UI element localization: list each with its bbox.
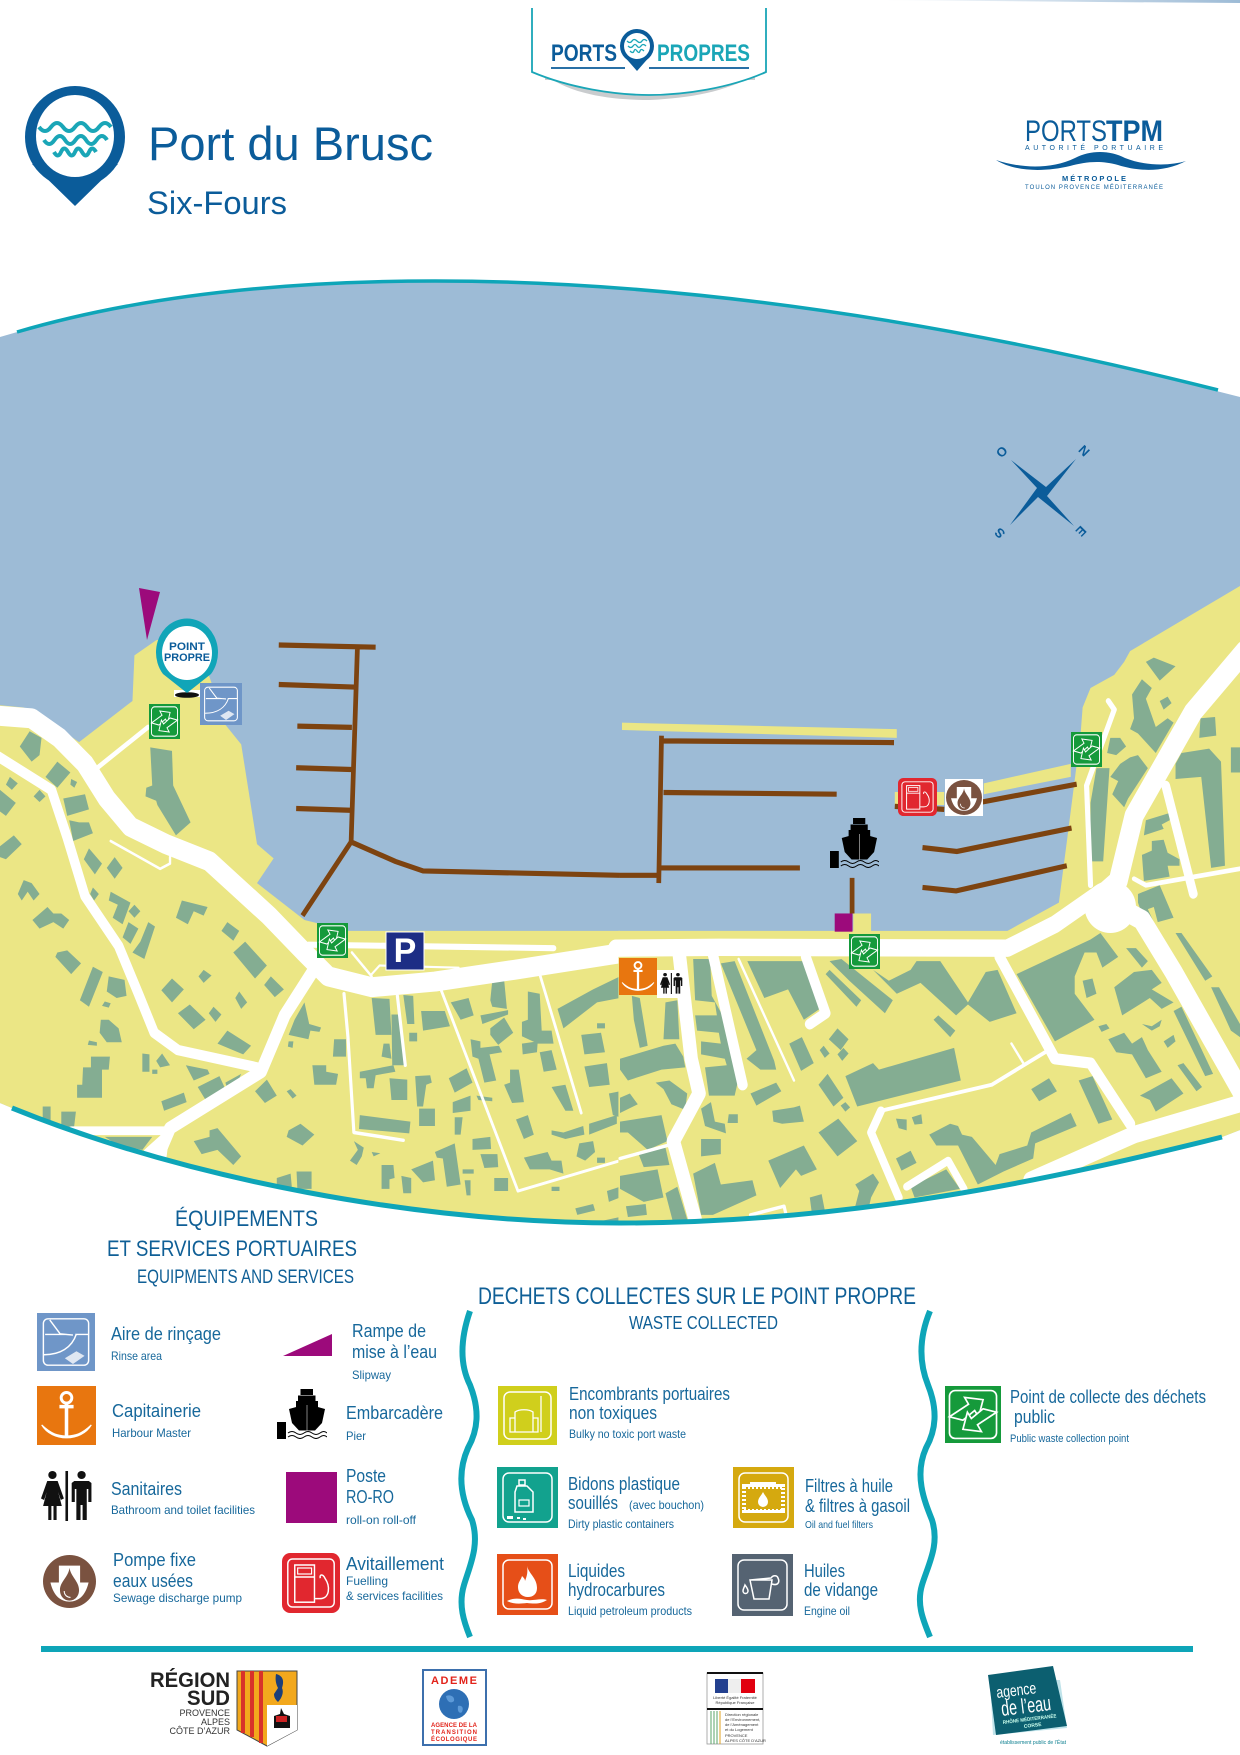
legend: ro-ro: RO-RO [346, 1487, 394, 1507]
logo: Agence de l'eau: CORSE [1024, 1722, 1043, 1730]
logo: DREAL: ALPES CÔTE D’AZUR [725, 1738, 766, 1743]
logo: DREAL: Direction régionale [725, 1712, 759, 1717]
map [0, 270, 1240, 1254]
legend: slipway: Rampe de [352, 1321, 426, 1341]
logo: DREAL: Liberté Égalité Fraternité [713, 1695, 758, 1700]
icon: waste collection east [1071, 732, 1102, 767]
title: Port du Brusc [148, 117, 433, 170]
compass [991, 442, 1093, 542]
icon: pier ship on map [830, 818, 879, 868]
legend: fuelling: Avitaillement [346, 1554, 444, 1574]
legend: plastic containers: souillés [568, 1493, 618, 1513]
legend: fuelling: & services facilities [346, 1589, 443, 1603]
logo: ADEME [423, 1670, 486, 1745]
wave divider left [461, 1311, 477, 1637]
panel: equipments and services [37, 1206, 444, 1613]
logo: Agence de l'eau: agence [995, 1680, 1037, 1702]
icon: fuel on map [898, 778, 937, 816]
logo: Région Sud [150, 1669, 297, 1746]
logo: Ports TPM: TPM [1106, 115, 1163, 148]
marker: point propre: POINT [169, 641, 205, 653]
logo: DREAL [707, 1672, 766, 1744]
legend: liquid hydrocarbons: Liquid petroleum products [568, 1604, 692, 1618]
legend: rinse area: Rinse area [111, 1349, 162, 1363]
icon: rinse area on map [200, 683, 242, 725]
legend: fuelling: Fuelling [346, 1574, 388, 1588]
legend: harbour master: Harbour Master [112, 1426, 191, 1440]
marker: point propre: PROPRE [164, 652, 210, 664]
legend: pier: Embarcadère [346, 1403, 443, 1423]
heading: equipments: ÉQUIPEMENTS [175, 1206, 318, 1231]
logo: Région Sud: ALPES [201, 1717, 230, 1727]
legend: pier: Pier [346, 1429, 366, 1443]
logo: Agence de l'eau: RHÔNE MÉDITERRANÉE [1002, 1711, 1057, 1726]
legend: engine oil: Engine oil [804, 1604, 850, 1618]
icon: waste collection west [149, 704, 180, 739]
legend: engine oil: Huiles [804, 1561, 845, 1581]
compass: N [1076, 442, 1093, 459]
legend: bulky waste: Bulky no toxic port waste [569, 1427, 686, 1441]
legend: liquid hydrocarbons: hydrocarbures [568, 1580, 665, 1600]
subtitle: Six-Fours [147, 185, 287, 221]
legend: toilets: Sanitaires [111, 1479, 182, 1499]
marker: point propre [156, 618, 218, 698]
legend: slipway: mise à l’eau [352, 1342, 437, 1362]
compass: E [1073, 523, 1090, 540]
logo: Ports TPM: TOULON PROVENCE MÉDITERRANÉE [1025, 184, 1163, 191]
legend: ro-ro [286, 1466, 417, 1527]
logo: Ports Propres: PORTS [551, 40, 617, 67]
footer rule [41, 1646, 1193, 1652]
logo: ADEME: TRANSITION [431, 1730, 477, 1736]
logo: Agence de l'eau: établissement public de l’État [1000, 1739, 1066, 1746]
logo: ADEME: ADEME [431, 1675, 477, 1687]
legend: slipway: Slipway [352, 1368, 391, 1382]
icon: parking: P [394, 932, 416, 970]
legend: public waste collection: Public waste collection point [1010, 1433, 1129, 1445]
logo: Ports TPM: AUTORITÉ PORTUAIRE [1025, 143, 1163, 152]
legend: plastic containers: (avec bouchon) [629, 1498, 704, 1512]
panel: waste collected [478, 1283, 916, 1618]
logo: DREAL: de l’Environnement, [725, 1717, 760, 1722]
legend: sewage pump: Pompe fixe [113, 1550, 196, 1570]
heading: equipments: EQUIPMENTS AND SERVICES [137, 1267, 354, 1288]
icon: slipway on map [139, 588, 160, 640]
logo: DREAL: PROVENCE [725, 1733, 748, 1738]
heading: waste collected: DECHETS COLLECTES SUR LE POINT PROPRE [478, 1283, 916, 1310]
icon: waste collection quay [317, 923, 348, 958]
logo: DREAL: et du Logement [725, 1727, 754, 1732]
legend: plastic containers: Dirty plastic containers [568, 1517, 674, 1531]
logo: DREAL: de l’Aménagement [725, 1722, 759, 1727]
icon: sewage pump on map [945, 779, 983, 816]
logo: DREAL: République Française [716, 1700, 755, 1705]
heading: waste collected: WASTE COLLECTED [629, 1313, 778, 1333]
heading: equipments: ET SERVICES PORTUAIRES [107, 1236, 357, 1261]
logo: Agence de l'eau: de l’eau [1000, 1692, 1052, 1721]
legend: oil filters [733, 1467, 910, 1531]
legend: engine oil [732, 1554, 878, 1618]
compass: S [991, 525, 1008, 542]
legend: public waste collection: public [1014, 1407, 1055, 1427]
logo: Ports TPM: PORTS [1025, 115, 1107, 148]
icon: toilets on map [657, 970, 685, 998]
logo: ADEME: AGENCE DE LA [431, 1723, 478, 1729]
legend: toilets [41, 1471, 255, 1521]
heading: equipments [107, 1206, 357, 1288]
icon: location pin with waves [25, 86, 125, 206]
icon: waste collection centre [849, 934, 880, 969]
legend: public waste collection [945, 1386, 1206, 1445]
heading: waste collected [478, 1283, 916, 1333]
logo: Ports Propres [532, 8, 766, 100]
logo: Agence de l'eau [988, 1666, 1067, 1746]
logo: Région Sud: PROVENCE [179, 1708, 230, 1718]
logo: Ports Propres: PROPRES [657, 40, 750, 67]
legend: pier [277, 1389, 443, 1443]
compass: O [993, 443, 1011, 461]
logo: Région Sud: CÔTE D’AZUR [170, 1726, 230, 1736]
legend: fuelling [282, 1553, 444, 1613]
land boundary arc bottom [12, 1108, 1222, 1223]
logo: Région Sud: RÉGION [150, 1669, 230, 1692]
logo: ADEME: ÉCOLOGIQUE [431, 1735, 477, 1743]
legend: liquid hydrocarbons [497, 1554, 692, 1618]
legend: ro-ro: Poste [346, 1466, 386, 1486]
top corner sliver [878, 0, 1240, 3]
legend: bulky waste [498, 1384, 730, 1445]
wave divider right [920, 1311, 935, 1637]
legend: public waste collection: Point de collecte des déchets [1010, 1387, 1206, 1407]
legend: liquid hydrocarbons: Liquides [568, 1561, 625, 1581]
legend: slipway [283, 1321, 437, 1382]
legend: plastic containers [497, 1467, 704, 1531]
legend: sewage pump: Sewage discharge pump [113, 1591, 242, 1605]
logo: Région Sud: SUD [187, 1687, 230, 1710]
legend: rinse area: Aire de rinçage [111, 1324, 221, 1344]
legend: oil filters: Filtres à huile [805, 1476, 893, 1496]
logo: Ports TPM: MÉTROPOLE [1062, 174, 1126, 183]
legend: sewage pump: eaux usées [113, 1571, 193, 1591]
legend: bulky waste: Encombrants portuaires [569, 1384, 730, 1404]
icon: parking [386, 932, 424, 970]
sea boundary arc top [17, 281, 1218, 390]
legend: plastic containers: Bidons plastique [568, 1474, 680, 1494]
legend: toilets: Bathroom and toilet facilities [111, 1503, 255, 1517]
legend: harbour master [37, 1386, 201, 1445]
legend: rinse area [37, 1313, 221, 1371]
legend: ro-ro: roll-on roll-off [346, 1513, 417, 1527]
legend: oil filters: & filtres à gasoil [805, 1496, 910, 1516]
legend: bulky waste: non toxiques [569, 1403, 657, 1423]
legend: harbour master: Capitainerie [112, 1401, 201, 1421]
legend: oil filters: Oil and fuel filters [805, 1519, 873, 1531]
icon: harbour master on map [619, 958, 657, 995]
logo: Ports TPM [996, 115, 1186, 191]
legend: sewage pump [43, 1550, 242, 1608]
legend: engine oil: de vidange [804, 1580, 878, 1600]
